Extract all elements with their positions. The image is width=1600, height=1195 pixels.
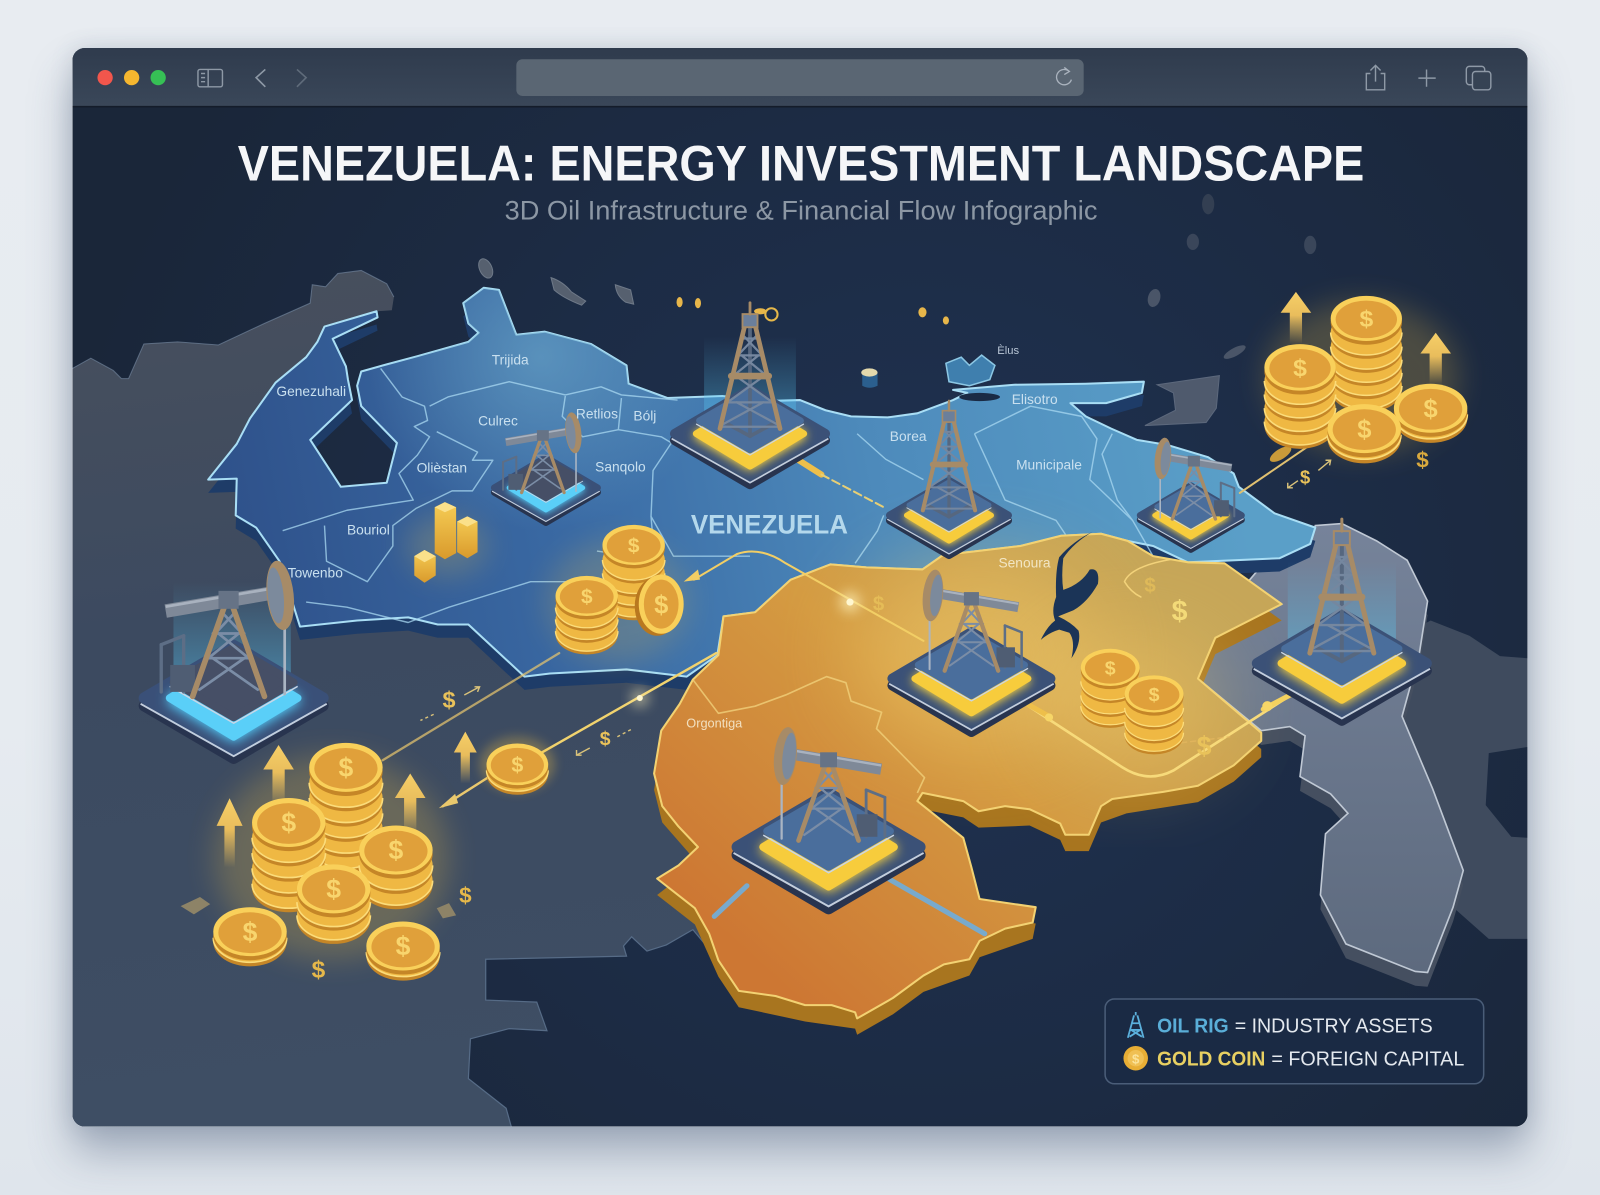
coins: bottom left stacks: $ — [459, 883, 472, 908]
map: Guyana grey region — [1198, 524, 1463, 987]
legend oil rig label: OIL RIG — [1157, 1016, 1229, 1038]
coins: top right stacks: $ — [1424, 395, 1438, 423]
small bar chart — [406, 502, 488, 583]
rig: north central derrick — [672, 303, 828, 484]
coins: Guayana stacks: $ — [1149, 685, 1160, 706]
coins: bottom left stacks: $ — [339, 753, 354, 783]
legend gold coin label: GOLD COIN — [1157, 1048, 1265, 1070]
rig: left offshore pumpjack — [141, 559, 327, 758]
flow arrowheads and sparkles — [439, 443, 1294, 808]
map: Trinidad island — [1145, 376, 1219, 426]
map: small islands — [476, 194, 1316, 388]
coins: top right stacks: $ — [1359, 306, 1374, 333]
rig: eastern pumpjack — [1138, 437, 1244, 550]
coins: bottom left stacks: $ — [326, 874, 341, 904]
region labels: Bouriol — [347, 523, 390, 538]
region labels: Bólj — [633, 408, 656, 423]
coins: bottom left stacks: $ — [312, 957, 326, 984]
flow dollar signs: $ — [873, 593, 885, 615]
map: dark reservoir river — [1041, 532, 1098, 658]
region labels: Elisotro — [1012, 392, 1058, 407]
coin: travelling coin on flow line: $ — [511, 752, 523, 777]
coins: bottom left stacks: $ — [396, 931, 411, 961]
legend gold coin meaning: = FOREIGN CAPITAL — [1271, 1048, 1464, 1070]
sidebar icon — [198, 69, 222, 87]
coins: top right stacks — [1264, 292, 1467, 472]
rig: Guayana pumpjack — [889, 569, 1054, 732]
financial flow lines — [383, 434, 1327, 934]
region labels: Trijida — [492, 352, 529, 367]
map: far east neighbour — [1402, 620, 1528, 939]
coins: top right stacks: $ — [1416, 447, 1429, 472]
browser toolbar — [72, 48, 1528, 107]
country label: VENEZUELA — [691, 510, 848, 540]
rig: southern pumpjack — [734, 726, 924, 908]
coins: central stacks: $ — [581, 586, 593, 608]
region labels: Sanqolo — [595, 459, 646, 474]
reload icon — [1057, 67, 1071, 85]
small flow arrows — [420, 460, 1331, 755]
legend gold coin icon — [1123, 1046, 1148, 1070]
region labels: Towenbo — [288, 566, 343, 581]
back chevron — [256, 69, 265, 87]
flow dollar signs: $ — [600, 728, 611, 750]
region labels: Èlus — [997, 344, 1019, 357]
title: VENEZUELA: ENERGY INVESTMENT LANDSCAPE — [238, 136, 1364, 192]
region labels: Senoura — [998, 555, 1051, 570]
map: Venezuela blue northern region — [208, 288, 1315, 690]
map: Guayana orange southern region — [654, 534, 1282, 1035]
region labels: Orgontiga — [686, 716, 743, 731]
coins: central stacks — [546, 525, 689, 663]
region labels: Olièstan — [417, 460, 467, 475]
flow dollar signs: $ — [1300, 467, 1310, 488]
subtitle: 3D Oil Infrastructure & Financial Flow Infographic — [505, 195, 1097, 225]
share icon — [1366, 65, 1385, 90]
legend gold coin icon: $ — [1132, 1051, 1140, 1066]
coins: top right stacks: $ — [1293, 355, 1307, 382]
flow dollar signs: $ — [1197, 731, 1212, 761]
coins: bottom left stacks — [181, 732, 477, 984]
coins: top right stacks: $ — [1357, 416, 1371, 444]
region labels — [276, 344, 1082, 731]
coin: travelling coin on flow line — [480, 737, 555, 795]
new tab icon — [1418, 69, 1436, 87]
rig: eastern derrick on grey land — [1254, 519, 1430, 720]
flow dollar signs: $ — [1172, 595, 1188, 627]
legend oil rig meaning: = INDUSTRY ASSETS — [1235, 1016, 1433, 1038]
window traffic lights — [97, 70, 166, 85]
coins: Guayana stacks — [1081, 649, 1183, 754]
rig: western pumpjack — [492, 412, 600, 523]
region labels: Genezuhali — [276, 384, 346, 399]
coins: Guayana stacks: $ — [1105, 659, 1116, 679]
flow dollar signs: $ — [442, 687, 456, 713]
region labels: Municipale — [1016, 457, 1082, 472]
tabs icon — [1466, 66, 1491, 90]
legend oil rig icon — [1128, 1012, 1144, 1038]
region labels: Culrec — [478, 414, 518, 429]
coins: bottom left stacks: $ — [281, 808, 296, 838]
rig: Borea derrick — [887, 401, 1011, 555]
region labels: Borea — [890, 429, 927, 444]
coins: bottom left stacks: $ — [389, 835, 404, 865]
coins: bottom left stacks: $ — [243, 917, 258, 947]
map: neighbouring land west — [72, 270, 704, 1127]
region labels: Retlios — [576, 406, 618, 421]
flow dollar signs — [442, 467, 1310, 761]
address bar — [516, 59, 1084, 96]
coins: central stacks: $ — [654, 591, 668, 619]
forward chevron — [297, 69, 306, 87]
flow dollar signs: $ — [1144, 575, 1156, 597]
coins: central stacks: $ — [628, 535, 640, 557]
legend panel — [1105, 999, 1484, 1084]
